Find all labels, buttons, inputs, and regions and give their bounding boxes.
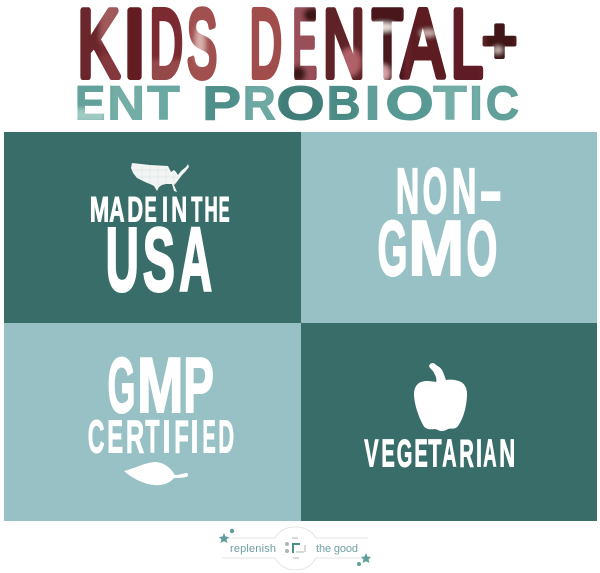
logo: replenish the good: [219, 527, 371, 570]
subtitle: ENT Probiotic: I: [469, 78, 483, 130]
text: vegetarian: R: [459, 432, 474, 476]
text: vegetarian: E: [414, 432, 428, 476]
text: made in the: T: [191, 190, 202, 230]
text: vegetarian: N: [499, 432, 515, 476]
text: non-: O: [423, 155, 447, 227]
text: vegetarian: E: [381, 432, 395, 476]
text: vegetarian: T: [428, 432, 442, 476]
icon: leaf: [124, 462, 188, 485]
text: made in the: H: [204, 190, 218, 230]
text: vegetarian: V: [364, 432, 379, 476]
text: vegetarian: A: [442, 432, 457, 476]
subtitle: ENT Probiotic: T: [433, 78, 467, 130]
plus sign: +: [482, 7, 517, 76]
panel: non-GMO: [301, 132, 597, 323]
subtitle: ENT Probiotic: I: [364, 78, 380, 130]
text: vegetarian: A: [483, 432, 497, 476]
text: made in the: A: [109, 190, 125, 230]
subtitle: ENT Probiotic: E: [75, 78, 105, 130]
subtitle: ENT Probiotic: N: [107, 78, 145, 130]
text: certified: I: [162, 410, 170, 462]
text: GMP: P: [183, 341, 214, 429]
panel: GMP certified: [4, 323, 301, 521]
panel: made in the USA: [4, 132, 301, 323]
text: GMP: M: [137, 341, 183, 429]
text: non-: N: [396, 155, 419, 227]
text: USA: U: [106, 210, 139, 310]
text: made in the: E: [144, 190, 157, 230]
text: vegetarian: G: [397, 432, 412, 476]
subtitle: ENT Probiotic: P: [202, 78, 241, 130]
text: GMP: G: [108, 341, 135, 429]
text: replenish: replenish: [230, 543, 276, 555]
text: made in the: N: [171, 190, 187, 230]
text: certified: R: [126, 410, 144, 462]
panel: made in the USA: E: [219, 190, 230, 230]
icon: stars: [219, 529, 371, 566]
text: certified: T: [145, 410, 160, 462]
text: vegetarian: I: [476, 432, 482, 476]
panel: GMP certified: D: [218, 410, 234, 462]
text: non-: N: [452, 155, 476, 227]
panel: vegetarian: [301, 323, 597, 521]
text: GMO: O: [466, 204, 497, 292]
text: made in the: M: [90, 190, 109, 230]
text: USA: S: [143, 210, 175, 310]
subtitle: ENT Probiotic: O: [385, 78, 434, 130]
icon: molecule mark: [286, 538, 305, 558]
text: GMO: M: [408, 204, 464, 292]
text: non-: -: [480, 155, 502, 227]
subtitle: ENT Probiotic: R: [243, 78, 276, 130]
text: the good: the good: [316, 543, 358, 555]
subtitle: ENT Probiotic: B: [327, 78, 361, 130]
text: certified: F: [174, 410, 189, 462]
subtitle: ENT Probiotic: C: [486, 78, 519, 130]
icon: bell pepper: [414, 363, 467, 431]
text: certified: C: [88, 410, 104, 462]
title: Kids Dental+: [78, 0, 517, 98]
text: made in the: D: [127, 190, 143, 230]
icon: USA map: [131, 163, 189, 192]
text: USA: A: [179, 210, 212, 310]
subtitle: ENT Probiotic: O: [276, 78, 325, 130]
subtitle: ENT Probiotic: T: [147, 78, 180, 130]
text: made in the: I: [162, 190, 168, 230]
text: GMO: G: [378, 204, 408, 292]
text: certified: E: [107, 410, 123, 462]
text: certified: I: [190, 410, 198, 462]
text: certified: E: [202, 410, 216, 462]
